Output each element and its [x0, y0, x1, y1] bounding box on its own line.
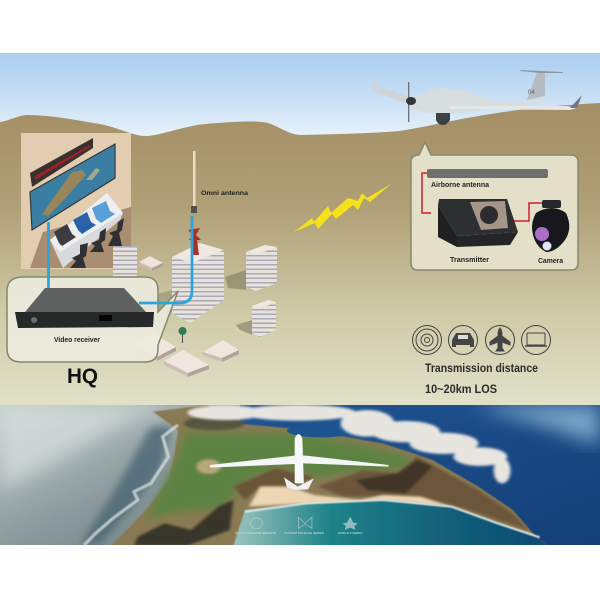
LED text line — [35, 145, 90, 180]
tail fin — [527, 72, 545, 100]
near-shore dark water — [80, 425, 172, 545]
chair 3 — [108, 218, 124, 246]
airborne antenna — [427, 169, 548, 178]
tree — [178, 327, 186, 343]
cloud band — [188, 405, 511, 483]
horizon glow right — [470, 405, 600, 445]
bottom logo 1 — [250, 518, 263, 529]
panel: control room — [21, 133, 131, 269]
back building — [113, 246, 137, 280]
wings — [210, 456, 388, 468]
heading: HQ: HQ — [67, 365, 98, 388]
icon: car — [448, 326, 478, 354]
building shadow — [135, 290, 172, 330]
cable: video wall to receiver — [47, 222, 50, 288]
laptop 3 — [92, 201, 115, 223]
caption: transmitter: Transmitter — [450, 255, 489, 264]
green plateau — [145, 433, 413, 520]
laptop 2 — [73, 212, 96, 234]
spinner — [406, 97, 416, 105]
far wing — [372, 78, 410, 104]
caption: video receiver: Video receiver — [54, 335, 100, 344]
sand patch on plateau — [196, 459, 221, 474]
callout bubble — [7, 277, 178, 362]
receiver logo — [31, 317, 37, 323]
video wall island 2 — [86, 168, 100, 180]
gimbal camera — [436, 113, 450, 125]
coastline land — [111, 405, 547, 546]
thermal lens — [535, 227, 549, 241]
propeller — [408, 82, 409, 122]
main wing — [450, 106, 577, 110]
horizon glow left — [0, 405, 170, 490]
distant ridge — [184, 416, 245, 431]
bottom logo 3 — [343, 517, 358, 530]
icons row — [412, 326, 550, 354]
video wall island — [42, 170, 86, 216]
right sea — [240, 405, 600, 545]
cable: receiver to antenna — [139, 216, 192, 303]
antenna mast — [188, 151, 201, 255]
brown cliffs right — [318, 457, 528, 530]
fuselage — [295, 434, 304, 483]
console desk — [50, 193, 123, 268]
fan — [480, 206, 498, 224]
chair 1 — [70, 243, 88, 268]
sand beach — [249, 487, 452, 507]
text: range: 10~20km LOS — [425, 382, 497, 396]
mid cliffs — [233, 468, 314, 500]
left sea — [0, 405, 240, 545]
stabilizer — [520, 70, 563, 73]
red tower frame — [188, 228, 201, 255]
flat pad left — [132, 333, 176, 361]
video wall screen — [30, 144, 115, 230]
panel: airborne equipment callout — [411, 142, 578, 270]
surf left coast — [84, 425, 178, 545]
icon: signal rings — [412, 326, 442, 354]
surf line — [245, 500, 540, 537]
red LED display — [30, 138, 93, 187]
v tail — [284, 477, 314, 490]
receiver top — [25, 288, 146, 312]
logo caption 3: MOBILE SYNERGY — [338, 531, 363, 535]
icon: airplane — [486, 326, 514, 354]
receiver front — [15, 312, 154, 328]
bottom logo 2 — [299, 517, 312, 528]
transmitter — [438, 199, 518, 247]
drone over the coast — [210, 434, 388, 490]
dark cliffs left — [134, 500, 233, 546]
winglet — [570, 95, 582, 108]
callout bubble — [411, 142, 578, 270]
bay water — [233, 500, 547, 546]
room wall — [21, 133, 131, 269]
receiver display — [99, 315, 112, 321]
day lens — [542, 242, 552, 250]
camera — [532, 200, 569, 252]
main building — [172, 243, 224, 323]
panel: video receiver callout — [7, 277, 178, 362]
logo caption 2: CUSTOM PACKAGE SERIES — [284, 531, 324, 535]
ground hills — [0, 103, 600, 405]
dark rocks — [356, 460, 432, 493]
caption: omni antenna: Omni antenna — [201, 190, 248, 197]
chair 2 — [90, 228, 106, 252]
flat pad right — [203, 340, 239, 362]
right building 2 — [236, 300, 276, 337]
inner bay blue — [287, 428, 346, 438]
red cable: antenna to transmitter — [422, 173, 431, 213]
laptop 1 — [54, 224, 76, 246]
desk surface — [50, 193, 123, 252]
pad small top — [139, 256, 163, 271]
fan plate — [470, 201, 508, 230]
fuselage — [405, 88, 545, 114]
text: transmission distance: Transmission distance — [425, 361, 538, 375]
panel: aerial coastline photo — [0, 405, 600, 546]
room floor — [30, 207, 131, 268]
flat pad bottom — [164, 350, 209, 377]
drone aircraft — [372, 70, 582, 125]
icon: laptop — [522, 326, 550, 354]
right building 1 — [225, 245, 277, 291]
caption: airborne antenna: Airborne antenna — [431, 180, 490, 189]
logo caption 1: SOLUTIONS AND SERVICE — [235, 531, 276, 535]
lightning bolt — [294, 184, 391, 232]
caption: camera: Camera — [538, 258, 563, 265]
sky background — [0, 53, 600, 143]
red cable: transmitter to camera — [513, 203, 542, 221]
aircraft markings: 04 — [528, 90, 535, 96]
